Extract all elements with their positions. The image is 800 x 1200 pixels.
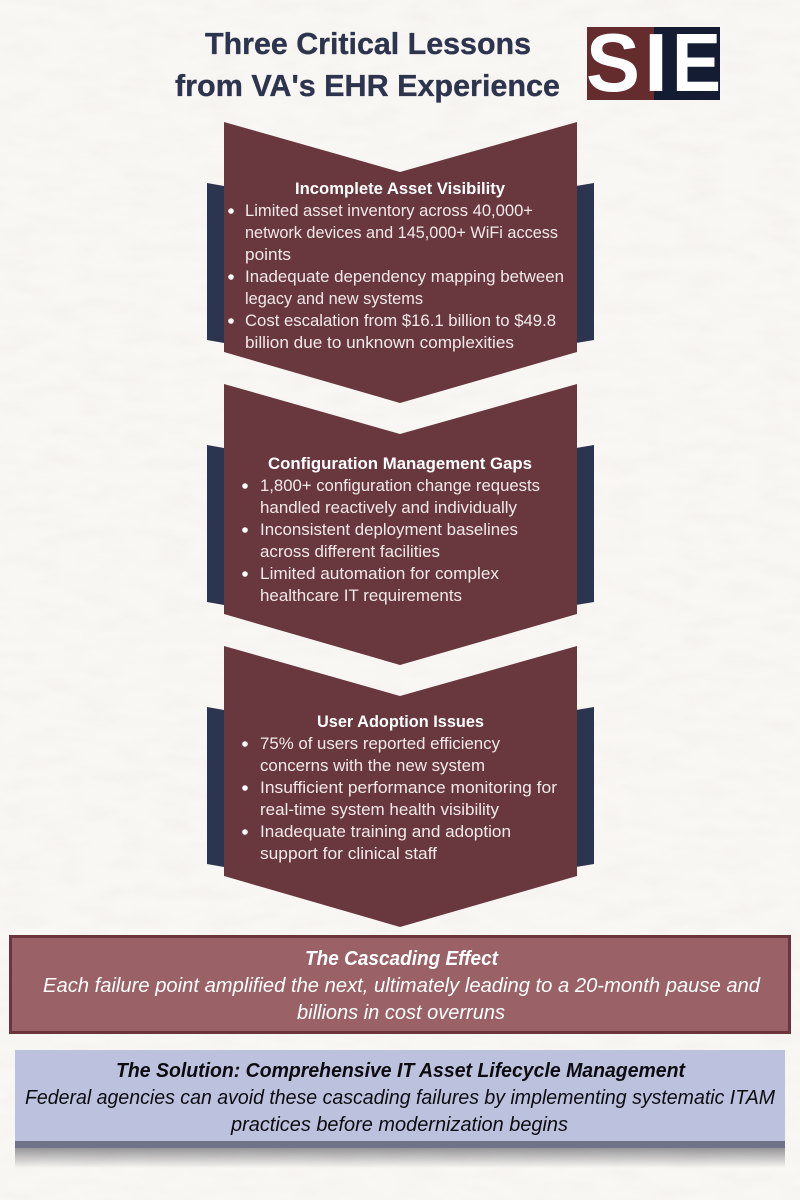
logo: SIE: [586, 16, 721, 109]
callout: the cascading effect: [10, 936, 790, 1032]
callout: the solution: Federal agencies can avoid these cascading failures by implementing systematic ITAM: [25, 1086, 776, 1109]
callout: the cascading effect: The Cascading Effect: [305, 947, 499, 970]
side tabs: [207, 707, 594, 867]
side tabs: [207, 445, 594, 605]
callout: the cascading effect: Each failure point amplified the next, ultimately leading to a 20-month pause and: [43, 974, 761, 997]
bullet list: Insufficient performance monitoring for: [260, 779, 558, 797]
bullet list: support for clinical staff: [260, 845, 437, 863]
bullet list: points: [245, 246, 291, 264]
bullet list: [228, 202, 564, 352]
bullet list: Inadequate dependency mapping between: [245, 268, 564, 286]
panel: user adoption issues: [207, 646, 594, 927]
bullet list: Inconsistent deployment baselines: [260, 521, 518, 539]
logo: SIE: I: [644, 16, 668, 109]
logo: SIE: E: [672, 16, 721, 109]
side tabs: [207, 183, 594, 343]
bullet list: network devices and 145,000+ WiFi access: [245, 224, 558, 242]
bullet list: handled reactively and individually: [260, 499, 518, 517]
title: from VA's EHR Experience: [175, 68, 560, 103]
bullet list: billion due to unknown complexities: [245, 334, 514, 352]
bullet list: legacy and new systems: [245, 290, 423, 308]
bullet list: Inadequate training and adoption: [260, 823, 511, 841]
callout: the solution: The Solution: Comprehensive IT Asset Lifecycle Management: [116, 1059, 686, 1082]
bullet list: across different facilities: [260, 543, 440, 561]
bullet list: healthcare IT requirements: [260, 587, 462, 605]
chevron: [224, 646, 577, 927]
callout: the solution: practices before modernization begins: [230, 1113, 568, 1136]
bullet list: [242, 735, 558, 863]
callout: the cascading effect: billions in cost overruns: [297, 1001, 505, 1024]
bullet list: Cost escalation from $16.1 billion to $49.8: [245, 312, 556, 330]
chevron: [224, 122, 577, 403]
heading: Configuration Management Gaps: [268, 455, 532, 473]
panel: incomplete asset visibility: [207, 122, 594, 403]
bullet list: real-time system health visibility: [260, 801, 500, 819]
bullet list: concerns with the new system: [260, 757, 485, 775]
bullet list: 75% of users reported efficiency: [260, 735, 501, 753]
chevron: [224, 384, 577, 665]
bullet list: 1,800+ configuration change requests: [260, 477, 540, 495]
title: [175, 26, 560, 103]
heading: Incomplete Asset Visibility: [295, 180, 506, 198]
logo: SIE: S: [586, 16, 640, 109]
bullet list: Limited asset inventory across 40,000+: [245, 202, 533, 220]
callout: the solution: [15, 1050, 785, 1168]
bullet list: [242, 477, 540, 605]
title: Three Critical Lessons: [205, 26, 531, 61]
bullet list: Limited automation for complex: [260, 565, 500, 583]
heading: User Adoption Issues: [317, 713, 484, 731]
panel: configuration management gaps: [207, 384, 594, 665]
